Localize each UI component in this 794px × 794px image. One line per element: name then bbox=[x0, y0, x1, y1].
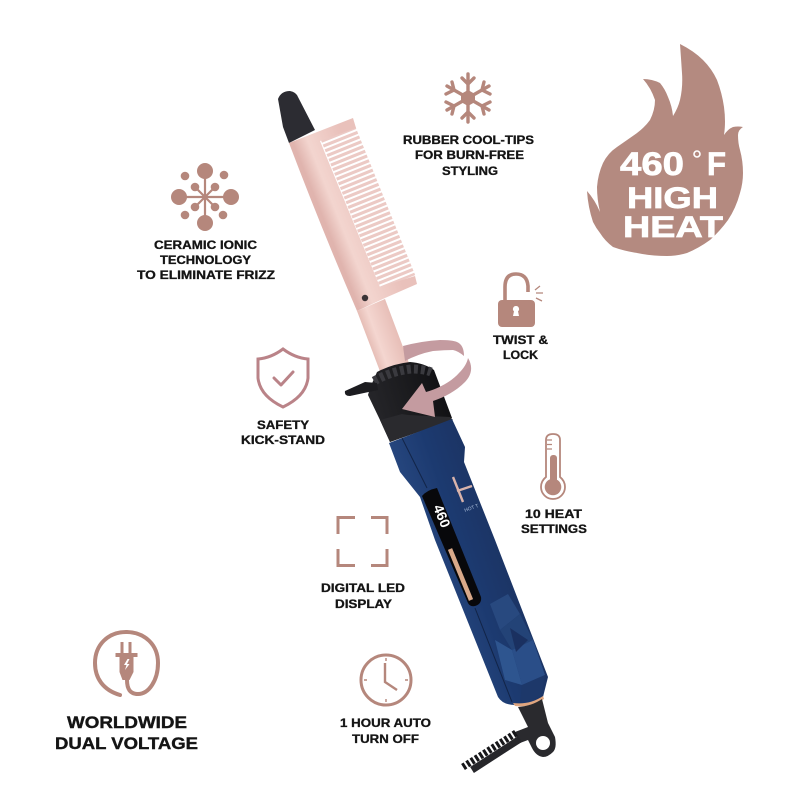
display window bbox=[422, 488, 481, 606]
text: heat settings bbox=[521, 509, 587, 536]
text: rubber cool-tips: RUBBER COOL-TIPS bbox=[403, 135, 534, 147]
rubber cool tip bbox=[278, 91, 315, 143]
icon: ceramic ions bbox=[171, 163, 239, 231]
text: heat settings: 10 HEAT bbox=[525, 509, 582, 521]
diamond texture bbox=[490, 594, 545, 703]
comb teeth bbox=[338, 133, 398, 282]
fahrenheit: F bbox=[707, 146, 726, 182]
barrel bbox=[357, 299, 409, 374]
text: safety kick-stand: SAFETY bbox=[257, 420, 309, 432]
brand text: HOT T bbox=[464, 503, 480, 514]
text: safety kick-stand bbox=[241, 420, 325, 447]
text: rubber cool-tips bbox=[403, 135, 534, 178]
comb body bbox=[289, 118, 417, 311]
text: heat settings: SETTINGS bbox=[521, 524, 587, 536]
text: auto turn off: TURN OFF bbox=[352, 734, 419, 746]
cord strain relief bbox=[515, 699, 556, 757]
heat: HEAT bbox=[623, 211, 723, 244]
handle bbox=[389, 419, 548, 705]
ribbed vent bbox=[374, 369, 431, 381]
cord solid band bbox=[472, 739, 520, 770]
screw bbox=[362, 295, 368, 301]
icon: plug bbox=[95, 632, 158, 695]
temperature text: 460 bbox=[620, 146, 684, 182]
flame shape bbox=[587, 44, 743, 256]
text: worldwide dual voltage: DUAL VOLTAGE bbox=[55, 735, 198, 753]
text: auto turn off: 1 HOUR AUTO bbox=[340, 718, 431, 730]
text: twist and lock: TWIST & bbox=[493, 335, 548, 347]
degree mark bbox=[694, 151, 700, 157]
cord ribs bbox=[463, 733, 516, 767]
display reading: 460 bbox=[430, 502, 454, 530]
copper end ring bbox=[513, 696, 544, 706]
text: rubber cool-tips: FOR BURN-FREE bbox=[415, 150, 524, 162]
heat guard and collar bbox=[368, 362, 452, 442]
text: ceramic ionic: TECHNOLOGY bbox=[160, 255, 251, 267]
logo H bbox=[453, 477, 472, 502]
text: digital led display: DIGITAL LED bbox=[321, 583, 405, 595]
flame badge bbox=[587, 44, 743, 256]
handle seam lower bbox=[475, 608, 512, 702]
icon: snowflake bbox=[446, 74, 490, 122]
copper touch strip bbox=[450, 549, 471, 600]
handle seam upper bbox=[402, 438, 427, 488]
icon: display corners bbox=[338, 518, 387, 566]
text: digital led display bbox=[321, 583, 405, 611]
text: rubber cool-tips: STYLING bbox=[442, 166, 498, 178]
text: twist and lock: LOCK bbox=[503, 350, 539, 362]
text: worldwide dual voltage: WORLDWIDE bbox=[67, 714, 187, 732]
text: worldwide dual voltage bbox=[55, 714, 198, 753]
icon: open lock bbox=[498, 274, 543, 327]
text: ceramic ionic: CERAMIC IONIC bbox=[154, 240, 257, 252]
collar ring bbox=[380, 414, 453, 442]
icon: shield bbox=[258, 349, 308, 407]
rotation arrow front bbox=[402, 358, 471, 417]
text: ceramic ionic bbox=[137, 240, 275, 282]
text: auto turn off bbox=[340, 718, 431, 746]
text: safety kick-stand: KICK-STAND bbox=[241, 435, 325, 447]
rotation arrow back band bbox=[403, 340, 464, 361]
kick stand bbox=[345, 382, 378, 396]
hanging loop hole bbox=[536, 736, 550, 750]
text: ceramic ionic: TO ELIMINATE FRIZZ bbox=[137, 270, 275, 282]
high: HIGH bbox=[627, 182, 718, 215]
text: twist and lock bbox=[493, 335, 548, 362]
hot comb device bbox=[278, 91, 556, 770]
icon: thermometer bbox=[541, 434, 565, 499]
text: digital led display: DISPLAY bbox=[335, 599, 392, 611]
icon: clock bbox=[361, 655, 411, 705]
